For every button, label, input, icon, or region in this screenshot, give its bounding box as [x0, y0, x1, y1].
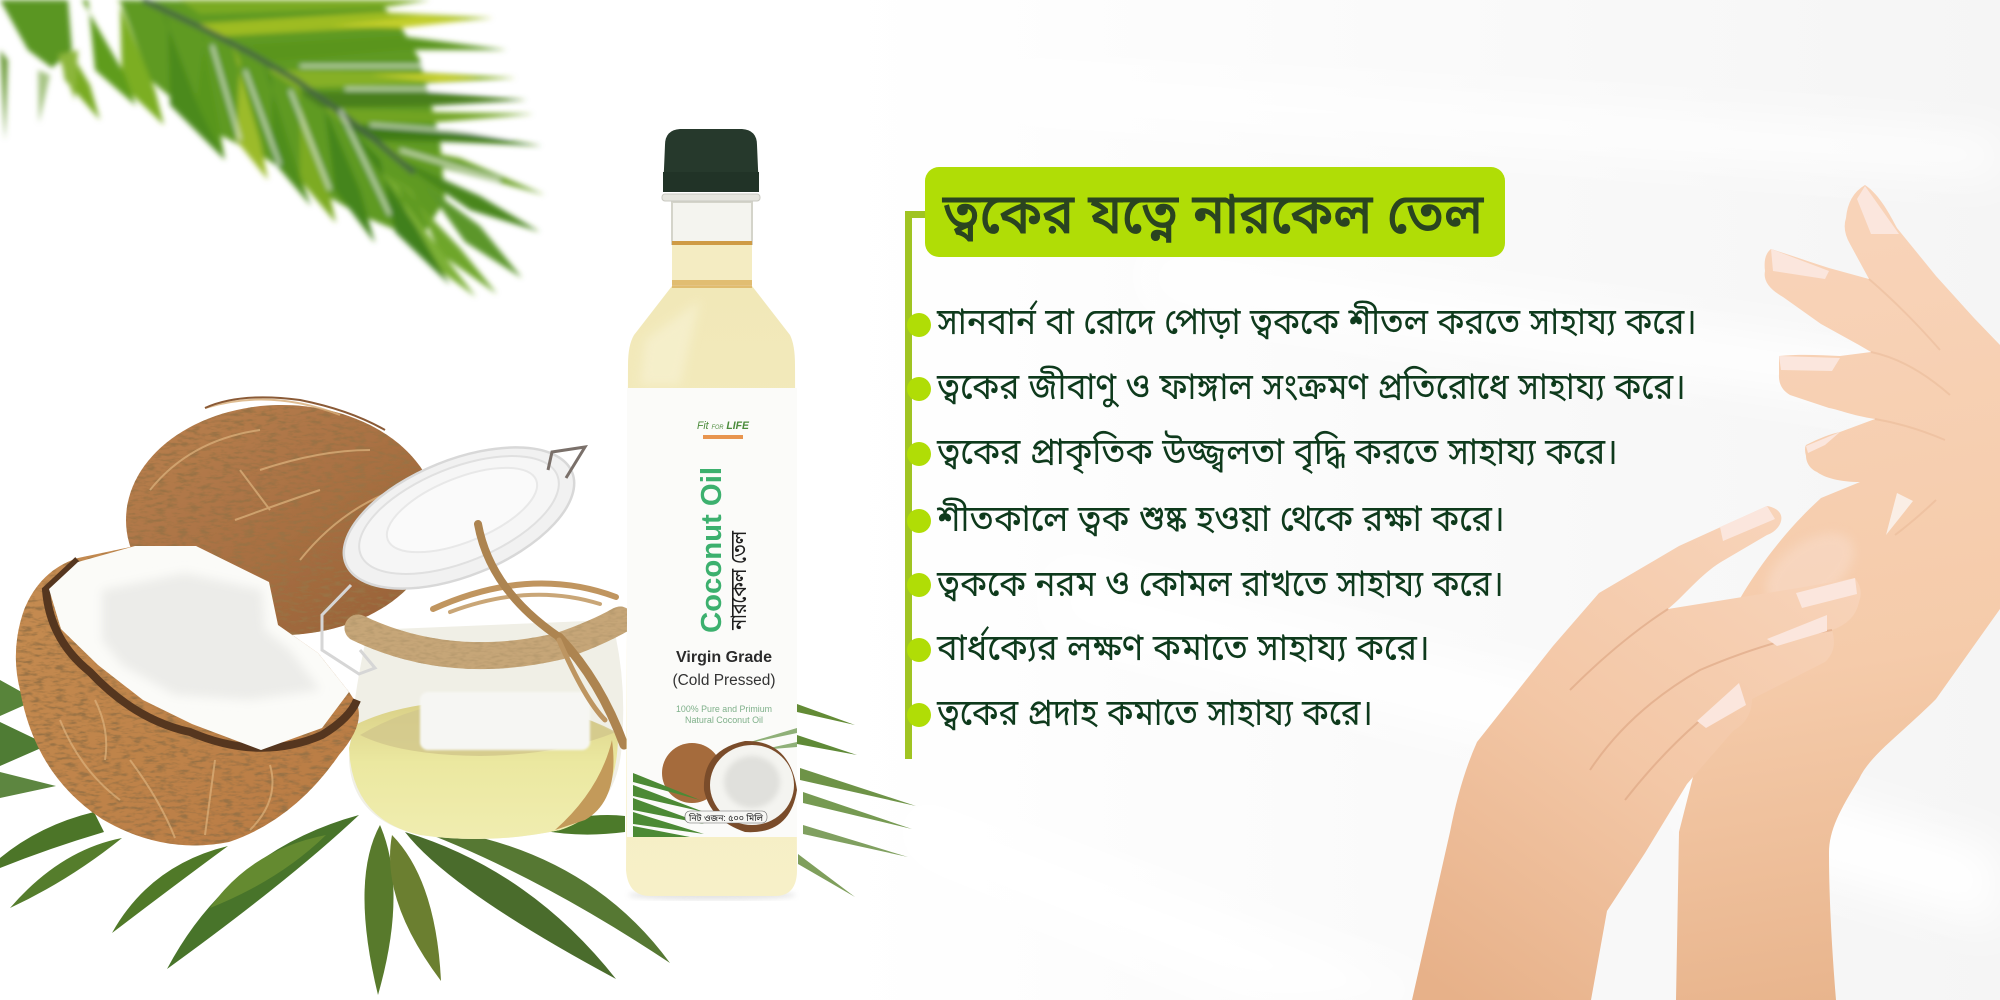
half coconut [16, 546, 359, 845]
brand logo [697, 420, 750, 439]
bright gaps between leaflets [212, 45, 510, 215]
palm frond top-left [0, 0, 545, 297]
bullet 1: সানবার্ন বা রোদে পোড়া ত্বককে শীতল করতে সাহায্য করে। [936, 300, 1697, 342]
jar of coconut oil [322, 419, 624, 839]
finger shading [1869, 279, 1950, 535]
label [627, 388, 797, 837]
heading [925, 167, 1505, 257]
Coconut Oil vertical title: Coconut Oil [696, 467, 728, 633]
bullet 5: ত্বককে নরম ও কোমল রাখতে সাহায্য করে। [936, 563, 1504, 604]
bottle of coconut oil [626, 129, 797, 900]
label artwork [633, 728, 797, 837]
palm leaves under the coconut and jar [0, 680, 916, 995]
nails [1771, 186, 1899, 453]
finger creases [1570, 609, 1832, 800]
coconut flesh [49, 546, 349, 750]
front lower hand [1412, 506, 1861, 1000]
jar glass body [349, 620, 623, 839]
bullet 2: ত্বকের জীবাণু ও ফাঙ্গাল সংক্রমণ প্রতিরোধে সাহায্য করে। [936, 365, 1686, 408]
bullet 7: ত্বকের প্রদাহ কমাতে সাহায্য করে। [936, 692, 1373, 733]
grade: Virgin Grade [676, 649, 772, 666]
benefit list [907, 300, 1697, 733]
rear raised hand [1676, 185, 2000, 1000]
heading: ত্বকের যত্নে নারকেল তেল [942, 182, 1484, 245]
twine [358, 524, 624, 745]
jar lid [322, 419, 594, 674]
bottle ring [662, 194, 760, 201]
bottle shadow [628, 890, 796, 900]
bullet 6: বার্ধক্যের লক্ষণ কমাতে সাহায্য করে। [936, 626, 1430, 668]
net weight pill: নিট ওজন: ৫০০ মিলি [688, 812, 763, 823]
cold pressed: (Cold Pressed) [672, 672, 776, 689]
bottle cap [663, 129, 759, 192]
bullet 3: ত্বকের প্রাকৃতিক উজ্জ্বলতা বৃদ্ধি করতে সাহায্য করে। [936, 430, 1618, 475]
Bengali vertical title: নারকেল তেল [726, 530, 751, 631]
bottle highlight [640, 300, 700, 385]
palm highlight [1753, 518, 1867, 622]
bullet 4: শীতকালে ত্বক শুষ্ক হওয়া থেকে রক্ষা করে। [936, 497, 1505, 539]
nails [1697, 506, 1857, 728]
purity line one: 100% Pure and Primium [676, 704, 772, 715]
jar oil [349, 700, 618, 839]
purity line two: Natural Coconut Oil [685, 715, 763, 726]
brand logo: Fit FOR LIFE [697, 420, 750, 432]
connector line [905, 211, 927, 759]
gap by the thumb [1886, 493, 1913, 535]
bottle body [626, 286, 797, 896]
coconut dark rim [46, 560, 357, 748]
whole coconut [126, 397, 438, 635]
